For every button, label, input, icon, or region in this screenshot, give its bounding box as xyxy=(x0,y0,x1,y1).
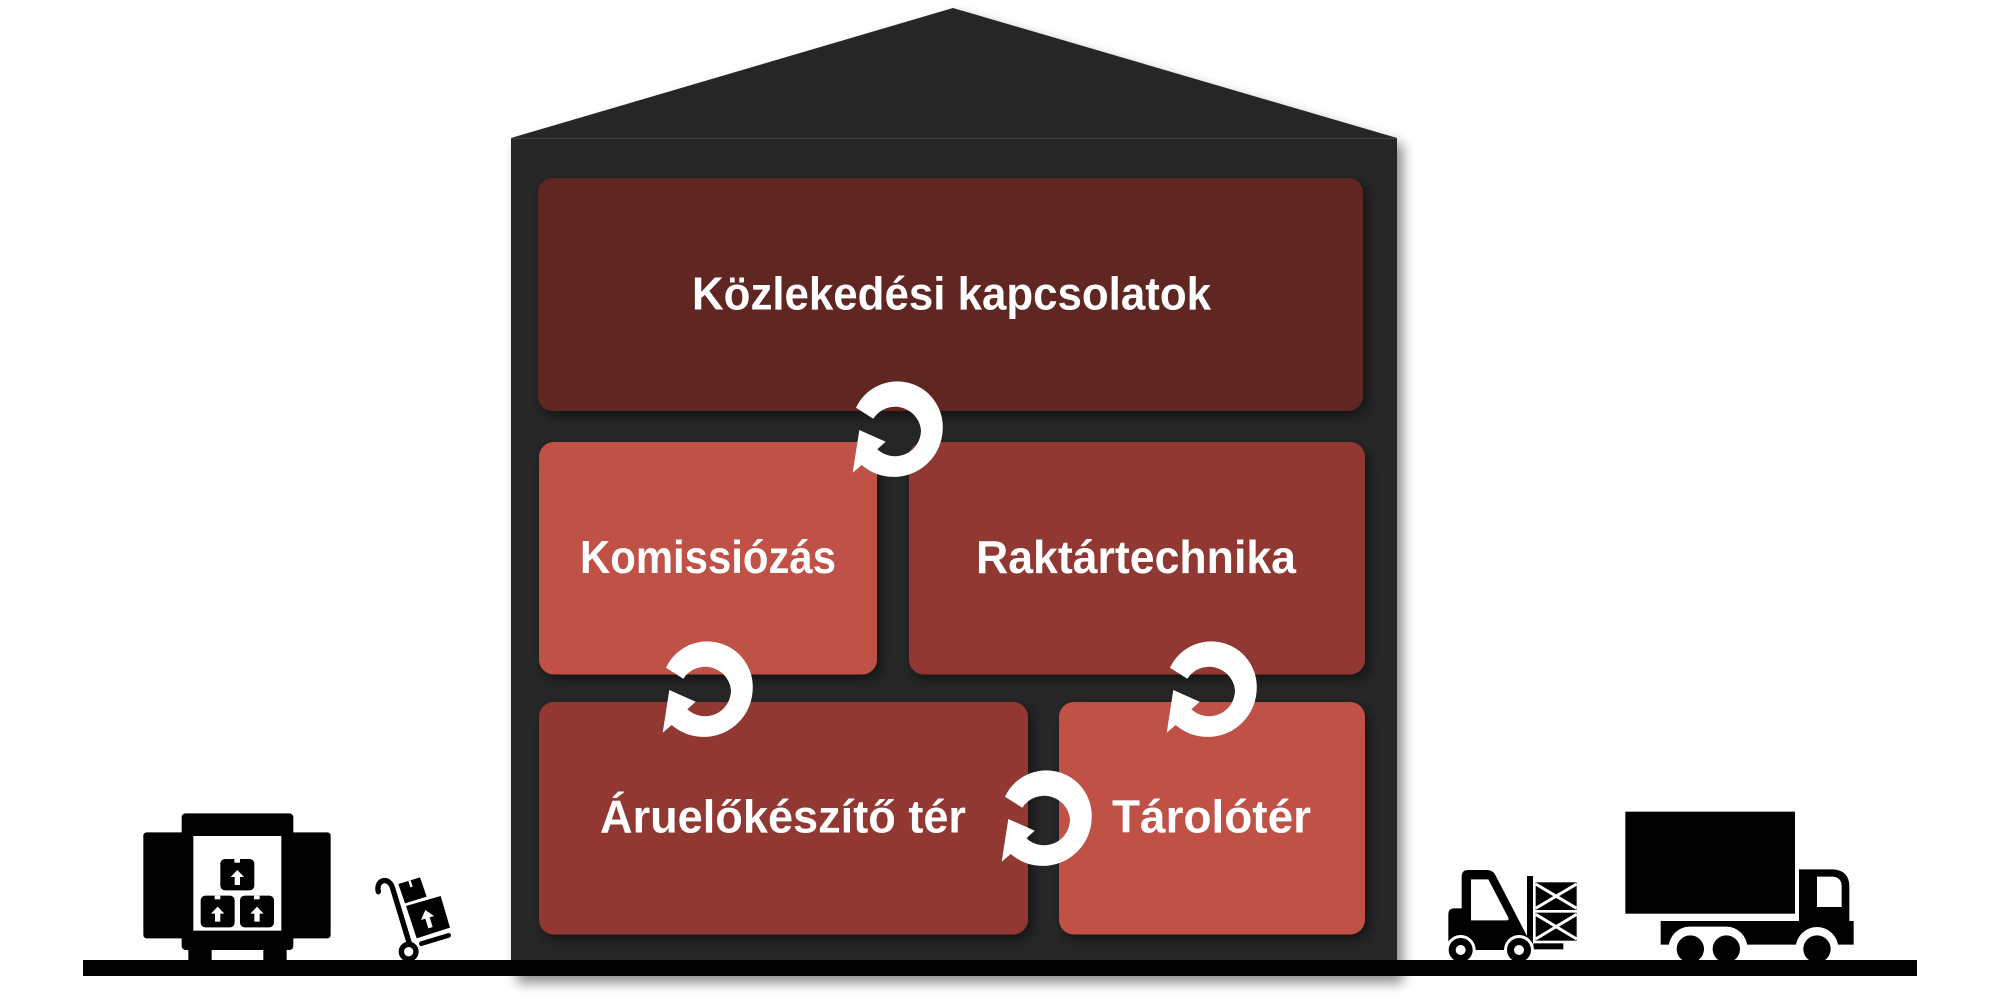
icon: delivery truck xyxy=(1625,812,1854,970)
panel: Raktártechnika xyxy=(909,442,1365,674)
icon: open truck rear with boxes xyxy=(143,813,331,963)
panel: Komissiózás: Komissiózás xyxy=(580,531,836,583)
panel: Áruelőkészítő tér xyxy=(539,702,1028,934)
panel: Raktártechnika: Raktártechnika xyxy=(976,531,1296,583)
panel: Tárolótér: Tárolótér xyxy=(1112,790,1311,842)
icon: cycle arrow bottom xyxy=(1002,770,1092,866)
icon: cycle arrow top xyxy=(853,381,943,477)
ground line xyxy=(83,960,1917,976)
panel: Áruelőkészítő tér: Áruelőkészítő tér xyxy=(600,790,966,842)
panel: Közlekedési kapcsolatok: Közlekedési kapcsolatok xyxy=(692,268,1211,320)
panel: Komissiózás xyxy=(539,442,877,674)
icon: cycle arrow right xyxy=(1167,641,1257,737)
icon: hand trolley with boxes xyxy=(378,877,450,959)
panel: Közlekedési kapcsolatok xyxy=(538,178,1363,411)
icon: cycle arrow left xyxy=(663,641,753,737)
icon: forklift with pallets xyxy=(1446,870,1577,965)
panel: Tárolótér xyxy=(1059,702,1365,934)
warehouse building xyxy=(511,8,1397,976)
